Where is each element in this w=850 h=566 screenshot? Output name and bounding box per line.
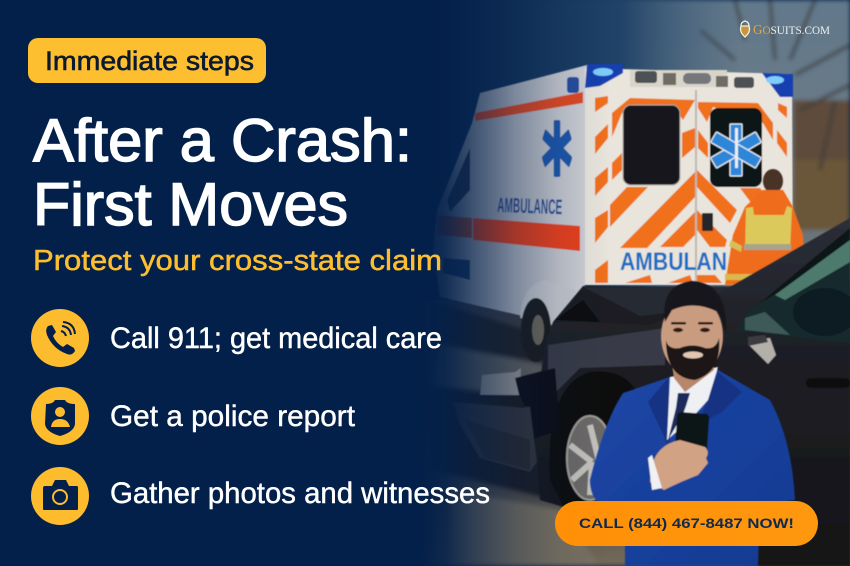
side star of life	[542, 120, 572, 177]
man in blue suit	[590, 281, 795, 566]
ambulance rear body	[585, 68, 793, 285]
step 1: call 911: Call 911; get medical care	[110, 322, 442, 355]
ambulance wheel	[520, 280, 575, 362]
eyes and brows	[671, 322, 713, 332]
rear ambulance lettering: AMBULAN	[620, 248, 727, 276]
icon: police badge	[31, 387, 89, 445]
phone	[675, 412, 709, 454]
rear right window with star of life	[710, 108, 762, 187]
hair	[664, 281, 726, 332]
icon: padlock	[740, 21, 750, 37]
wheel	[550, 372, 640, 510]
neck	[672, 360, 714, 392]
title: After a Crash:	[33, 107, 412, 174]
title	[33, 107, 412, 238]
tie	[668, 393, 690, 440]
ambulance	[433, 64, 793, 362]
door handle	[806, 378, 850, 388]
call to action button: CALL (844) 467-8487 NOW!	[579, 515, 794, 531]
ambulance: AMBULANCE	[497, 194, 563, 219]
photo background: sky, trees and road	[400, 0, 850, 566]
call to action button	[555, 501, 818, 546]
broken bumper	[453, 402, 537, 472]
side window	[447, 148, 470, 212]
shirt	[667, 367, 718, 440]
lapel shadow	[648, 372, 742, 445]
side window	[737, 250, 850, 343]
face	[661, 296, 723, 376]
door seam	[695, 90, 697, 285]
fender highlight	[548, 328, 665, 400]
orange chevrons	[595, 96, 787, 283]
crashed black car	[453, 218, 850, 566]
side mirror	[748, 338, 776, 364]
hand	[650, 440, 708, 490]
door handle	[702, 213, 713, 231]
side red stripes	[437, 92, 583, 280]
beard	[666, 338, 719, 380]
step 2: police report	[31, 387, 356, 445]
icon: phone	[31, 309, 89, 367]
top lamps	[630, 70, 754, 88]
paramedic in orange jacket	[725, 169, 807, 285]
badge: immediate steps	[28, 38, 266, 83]
rear left window	[623, 105, 680, 185]
title: First Moves	[33, 171, 348, 238]
step 2: police report: Get a police report	[110, 400, 356, 433]
badge: immediate steps: Immediate steps	[45, 46, 254, 76]
blue beacons	[567, 64, 793, 97]
sky tint at top	[400, 0, 740, 300]
logo: GOSUITS.COM	[753, 23, 830, 38]
ambulance side panel	[433, 65, 587, 330]
left navy gradient panel	[0, 0, 610, 566]
car body	[535, 218, 850, 566]
step 3: photos and witnesses	[31, 467, 490, 525]
icon: camera	[31, 467, 89, 525]
broken headlight	[480, 368, 560, 440]
subtitle: Protect your cross-state claim	[33, 245, 442, 277]
crumpled hood	[553, 286, 730, 325]
step 1: call 911	[31, 309, 442, 367]
step 3: photos and witnesses: Gather photos and witnesses	[110, 477, 490, 510]
suit	[590, 370, 795, 566]
